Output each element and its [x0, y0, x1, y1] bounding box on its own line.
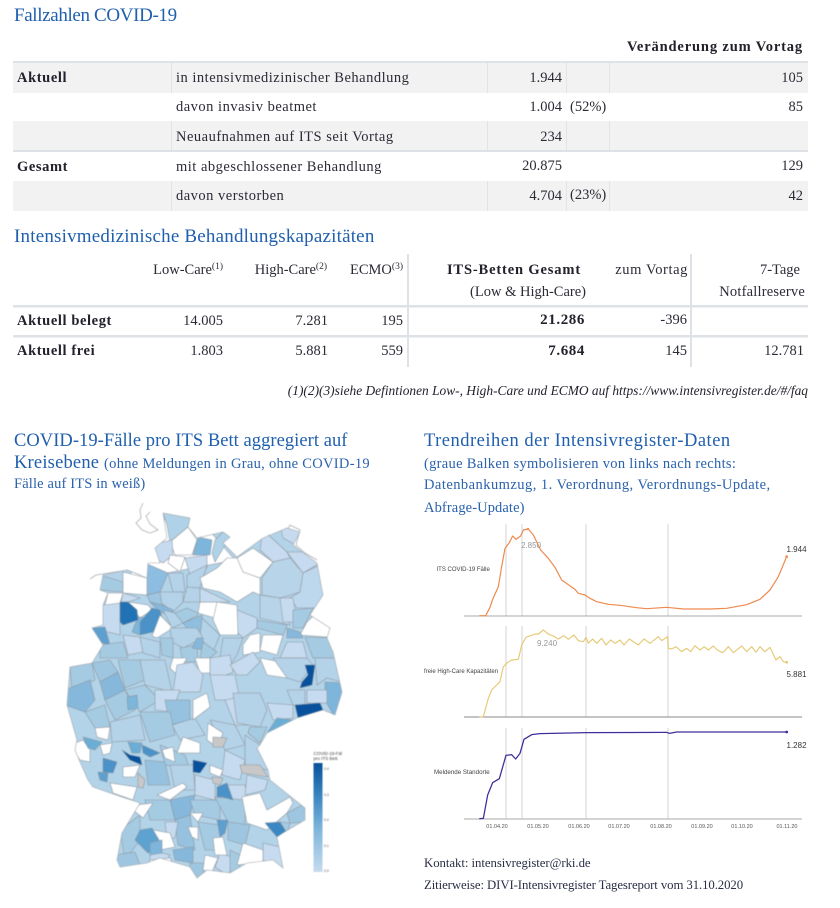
peak value: 2.850 [521, 541, 542, 550]
date axis labels: 01.07.20 [608, 824, 630, 830]
column header: Low-Care: Low-Care(1) [153, 262, 223, 278]
change: 105 [781, 70, 803, 86]
last value: 5.881 [786, 670, 807, 679]
legend ticks: 0.2 [324, 818, 329, 822]
series label: ITS COVID-19 Fälle [436, 567, 491, 573]
table rules [13, 254, 808, 367]
country outline [67, 513, 342, 878]
heading: map [14, 431, 370, 492]
map title second line: Kreisebene (ohne Meldungen in Grau, ohne COVID-19 [14, 453, 370, 473]
chart: ITS COVID-19 cases [436, 524, 807, 616]
row: invasiv beatmet: davon invasiv beatmet [176, 99, 317, 115]
chart: reporting sites [434, 728, 807, 830]
district shapes [66, 512, 342, 878]
value: 1.004 [529, 99, 562, 115]
value: 559 [381, 343, 403, 359]
map title line: COVID-19-Fälle pro ITS Bett aggregiert auf [14, 431, 347, 451]
yellow trend line [479, 630, 787, 717]
row label: belegt: Aktuell belegt [17, 313, 112, 329]
date axis labels [486, 824, 798, 830]
value: -396 [660, 312, 687, 328]
percent: (23%) [570, 187, 606, 203]
column header: zum Vortag: zum Vortag [615, 262, 688, 278]
date axis labels: 01.08.20 [650, 824, 672, 830]
citation: Zitierweise: DIVI-Intensivregister Tagesreport vom 31.10.2020 [424, 878, 743, 892]
date axis labels: 01.09.20 [691, 824, 713, 830]
value: 12.781 [764, 343, 804, 359]
column header: High-Care: High-Care(2) [255, 262, 327, 278]
panel: case numbers table [13, 39, 808, 211]
trend title: Trendreihen der Intensivregister-Daten [424, 431, 731, 451]
row: Neuaufnahmen: Neuaufnahmen auf ITS seit Vortag [176, 129, 394, 145]
row: in Behandlung: in intensivmedizinischer Behandlung [176, 70, 409, 86]
legend ticks: 0.1 [324, 844, 329, 848]
trend subtitle line 1: (graue Balken symbolisieren von links nach rechts: [424, 456, 736, 472]
map subtitle: Fälle auf ITS in weiß) [14, 476, 145, 492]
column header: Notfallreserve: Notfallreserve [719, 284, 805, 300]
column header: Veränderung zum Vortag [627, 39, 803, 55]
row label: Gesamt: Gesamt [17, 159, 68, 175]
table row backgrounds and rules [13, 61, 808, 211]
row label: Aktuell: Aktuell [17, 70, 67, 86]
percent: (52%) [570, 99, 606, 115]
trend subtitle line 3: Abfrage-Update) [424, 500, 525, 516]
change: 129 [781, 158, 803, 174]
legend ticks: 0.3 [324, 793, 329, 797]
value: 1.803 [190, 343, 223, 359]
last value: 1.282 [786, 741, 807, 750]
change: 42 [788, 188, 803, 204]
value: 234 [540, 129, 562, 145]
date axis labels: 01.06.20 [568, 824, 590, 830]
value: 1.944 [529, 70, 562, 86]
choropleth map of Germany [66, 502, 343, 879]
chart: free high-care capacity [424, 626, 807, 717]
contact: Kontakt: intensivregister@rki.de [424, 856, 591, 870]
value: 195 [381, 313, 403, 329]
value: 14.005 [183, 313, 223, 329]
value: 7.281 [295, 313, 328, 329]
value: 21.286 [540, 312, 585, 328]
peak value: 9.240 [537, 639, 558, 648]
purple trend line [479, 732, 787, 819]
islands and coast [90, 503, 317, 590]
date axis labels: 01.04.20 [486, 824, 508, 830]
value: 20.875 [522, 158, 562, 174]
row label: frei: Aktuell frei [17, 343, 95, 359]
column sub-header: (Low & High-Care) [470, 284, 586, 300]
legend ticks: 0.4 [324, 767, 329, 771]
colour bar [314, 763, 322, 872]
heading: trend charts [424, 431, 771, 516]
value: 4.704 [529, 188, 562, 204]
panel: capacity table [13, 254, 808, 367]
series label: freie High-Care Kapazitäten [424, 669, 498, 675]
value: 5.881 [295, 343, 328, 359]
column header: 7-Tage: 7-Tage [760, 262, 800, 278]
date axis labels: 01.10.20 [731, 824, 753, 830]
date axis labels: 01.11.20 [776, 824, 798, 830]
series label: Meldende Standorte [434, 769, 490, 776]
value: 7.684 [548, 343, 585, 359]
map legend [314, 751, 342, 873]
row: abgeschlossen: mit abgeschlossener Behandlung [176, 159, 382, 175]
heading: Fallzahlen: Fallzahlen COVID-19 [14, 5, 177, 26]
row: verstorben: davon verstorben [176, 188, 284, 204]
change: 85 [788, 99, 803, 115]
footnote: (1)(2)(3)siehe Defintionen Low-, High-Care und ECMO auf https://www.intensivregister.de/#/faq [288, 383, 808, 398]
column header: ITS-Betten: ITS-Betten Gesamt [447, 262, 581, 278]
legend ticks [324, 767, 329, 873]
trend charts [424, 524, 807, 830]
value: 145 [665, 343, 687, 359]
legend ticks: 0.0 [324, 869, 329, 873]
heading: Behandlungskapazitäten: Intensivmedizinische Behandlungskapazitäten [14, 226, 375, 247]
legend title second line: pro ITS Bett [314, 756, 338, 761]
legend title: COVID-19-Fäl [314, 751, 342, 756]
orange trend line [479, 529, 787, 616]
date axis labels: 01.05.20 [527, 824, 549, 830]
column header: ECMO: ECMO(3) [350, 262, 403, 278]
trend subtitle line 2: Datenbankumzug, 1. Verordnung, Verordnungs-Update, [424, 477, 771, 493]
last value: 1.944 [786, 545, 807, 554]
